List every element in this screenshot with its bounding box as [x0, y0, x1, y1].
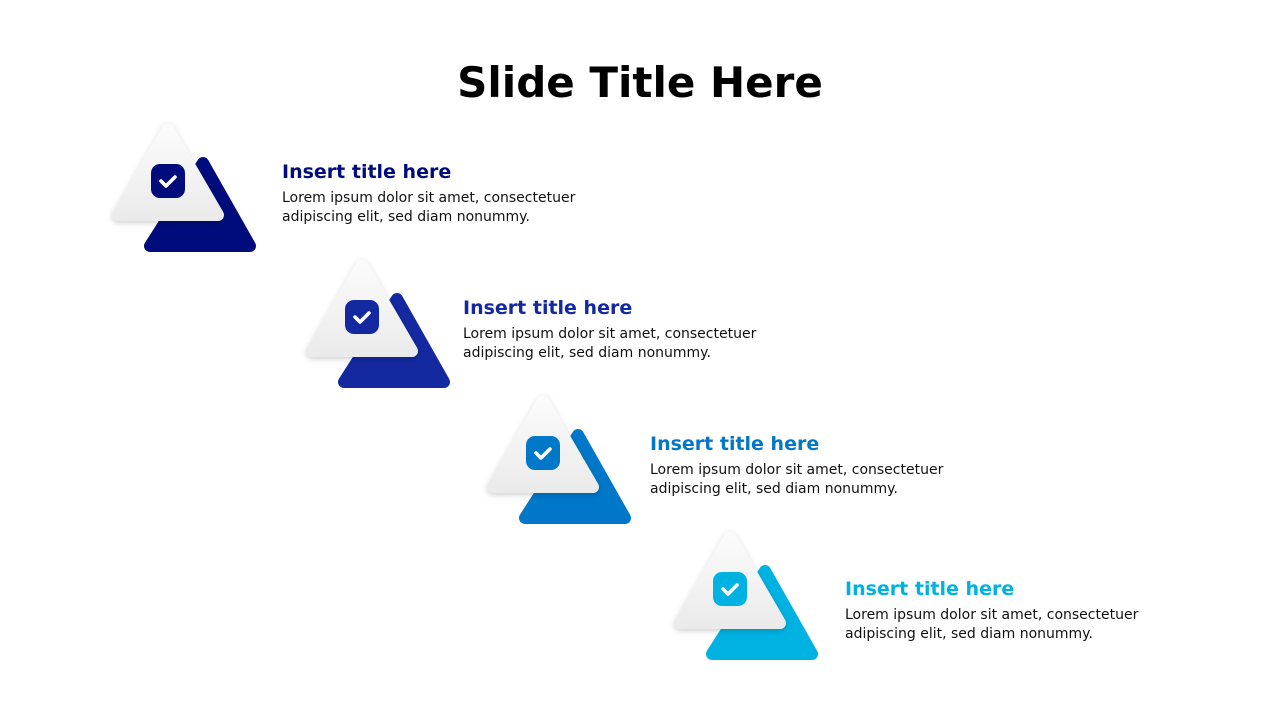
- title: Slide Title Here: [457, 58, 823, 107]
- icon: triangle 3: [493, 401, 625, 518]
- text block 1: Insert title here: [282, 161, 451, 183]
- text block 4: Insert title here: [845, 578, 1014, 600]
- text block 3: Insert title here: [650, 433, 819, 455]
- text block 4: Lorem ipsum dolor sit amet, consectetuer adipiscing elit, sed diam nonummy.: [845, 607, 1138, 642]
- text block 3: [650, 433, 944, 497]
- text block 2: Insert title here: [463, 297, 632, 319]
- text block 1: Lorem ipsum dolor sit amet, consectetuer adipiscing elit, sed diam nonummy.: [282, 190, 575, 225]
- text block 2: [463, 297, 756, 361]
- text block 1: [282, 161, 576, 225]
- icon: triangle 1: [118, 129, 250, 246]
- text block 2: Lorem ipsum dolor sit amet, consectetuer adipiscing elit, sed diam nonummy.: [463, 326, 756, 361]
- text block 3: Lorem ipsum dolor sit amet, consectetuer adipiscing elit, sed diam nonummy.: [650, 462, 943, 497]
- icon: triangle 4: [680, 537, 812, 654]
- text block 4: [845, 578, 1138, 642]
- icon: triangle 2: [312, 265, 444, 382]
